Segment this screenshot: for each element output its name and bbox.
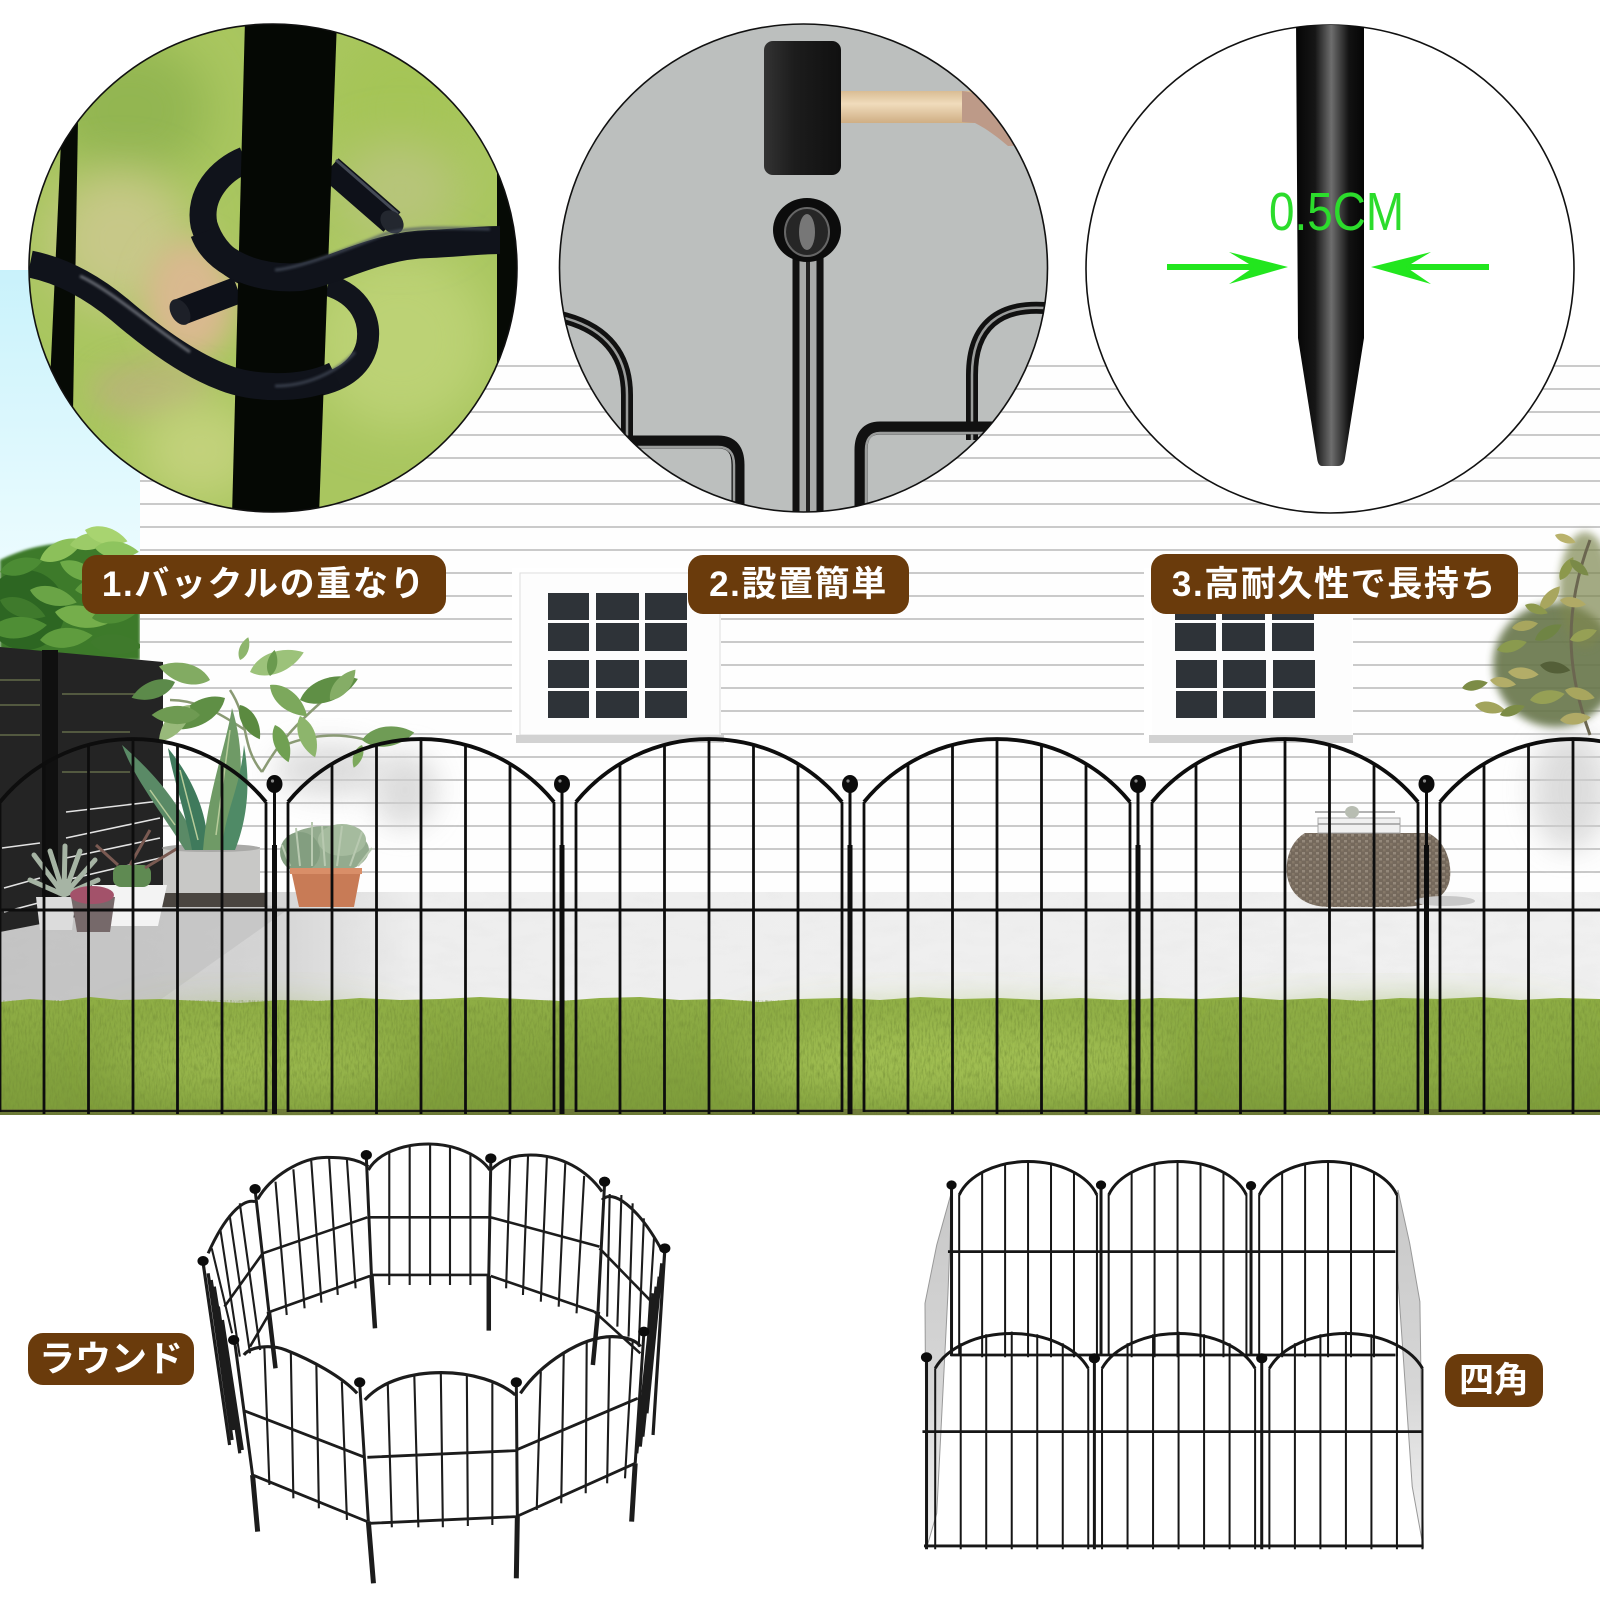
- wicker basket with books: [1287, 806, 1475, 907]
- round fence finials: [197, 1150, 670, 1387]
- front wire: [204, 232, 500, 277]
- label: round layout: ラウンド: [39, 1338, 183, 1379]
- label: 3 durable: 3.高耐久性で長持ち: [1172, 564, 1497, 604]
- right tree foliage: [1461, 531, 1600, 735]
- detail circle 2: easy installation with mallet: [556, 24, 1049, 520]
- back arches: [208, 1144, 661, 1253]
- lawn: [0, 997, 1600, 1115]
- bush behind left fence: [0, 522, 143, 660]
- window left: [512, 568, 724, 743]
- round fence layout diagram: [197, 1144, 670, 1583]
- detail circle 1: buckle overlap: [29, 20, 521, 516]
- garden scene background: [0, 270, 1600, 1115]
- label: square layout: [1445, 1354, 1543, 1407]
- front row panels: [935, 1332, 1422, 1549]
- front arches: [244, 1337, 640, 1400]
- label: 2 easy setup: [688, 555, 909, 614]
- mallet head: [764, 41, 841, 175]
- mallet handle and hand: [841, 91, 975, 123]
- back rails: [224, 1217, 653, 1353]
- arrow right: [1371, 252, 1489, 284]
- side pickets: [50, 122, 78, 407]
- measurement label: 0.5CM: [1269, 182, 1404, 242]
- rails and posts: [922, 1187, 1423, 1549]
- back posts: [255, 1157, 605, 1312]
- detail circle 3: stake thickness 0.5cm: [1086, 20, 1574, 513]
- window right: [1144, 568, 1353, 743]
- shadow on wall from plant: [275, 730, 1600, 850]
- label: square layout: 四角: [1459, 1361, 1529, 1400]
- snake plant and concrete pot: [122, 708, 265, 907]
- arrow left: [1167, 252, 1288, 284]
- potted broadleaf plant: [129, 636, 416, 772]
- label: 1 buckle overlap: 1.バックルの重なり: [102, 565, 426, 604]
- left wire frame: [556, 316, 627, 445]
- front pickets: [264, 1337, 633, 1527]
- side clusters: [203, 1250, 665, 1453]
- right wire frame: [972, 308, 1045, 440]
- front rails: [244, 1398, 638, 1523]
- back pickets: [212, 1144, 654, 1357]
- sky strip: [0, 270, 140, 570]
- front posts: [235, 1333, 644, 1522]
- terracotta pot with herb: [280, 822, 372, 907]
- label: 2 easy setup: 2.設置簡単: [709, 565, 888, 604]
- back row panels: [959, 1162, 1397, 1357]
- label: 3 durable: [1151, 554, 1518, 614]
- square fence finials: [921, 1180, 1267, 1363]
- dark slatted fence: [0, 647, 163, 932]
- stake: [1296, 20, 1364, 466]
- pavement: [0, 892, 1600, 1004]
- central post: [232, 20, 337, 516]
- side panels seen at an angle: [925, 1190, 1423, 1548]
- square fence layout diagram: [921, 1162, 1423, 1549]
- label: 1 buckle overlap: [82, 555, 446, 614]
- back wire stubs: [330, 168, 392, 222]
- wire loops behind post: [300, 285, 368, 388]
- post ball and shaft: [800, 258, 824, 512]
- arched fence panels: [0, 739, 1600, 1114]
- label: round layout: [28, 1333, 194, 1385]
- house siding: [140, 360, 1600, 900]
- small potted succulents: [30, 830, 178, 932]
